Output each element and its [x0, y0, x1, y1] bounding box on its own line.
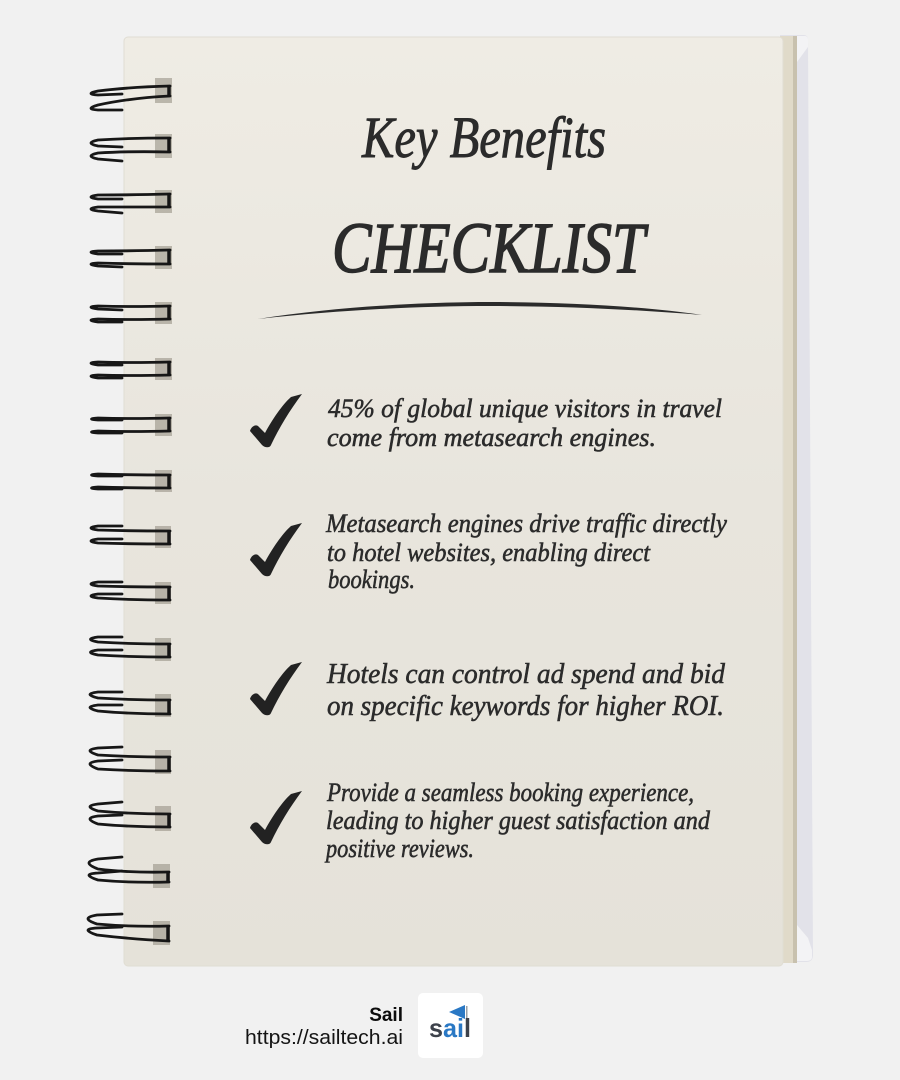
ring 16 — [88, 914, 170, 945]
ring 4 — [91, 246, 172, 269]
item 3 text — [326, 658, 725, 722]
checklist item 2 — [250, 509, 727, 594]
back cover — [780, 35, 813, 962]
item 2 text: to hotel websites, enabling direct — [327, 538, 651, 567]
item 2 text: Metasearch engines drive traffic directly — [325, 509, 727, 538]
ring 1 — [91, 78, 172, 110]
icon: check mark 4 — [250, 791, 302, 844]
item 4 text — [324, 778, 711, 863]
checklist item 3 — [250, 658, 725, 722]
spiral binding — [88, 78, 172, 945]
ring 8 — [92, 470, 172, 492]
icon: check mark 3 — [250, 662, 302, 715]
ring 6 — [91, 358, 172, 380]
footer brand — [245, 993, 483, 1058]
page edges — [780, 36, 797, 963]
brand url: https://sailtech.ai — [245, 1026, 403, 1049]
item 2 text: bookings. — [328, 565, 415, 594]
item 3 text: on specific keywords for higher ROI. — [327, 690, 724, 722]
icon: check mark 2 — [250, 523, 302, 576]
checklist item 4 — [250, 778, 711, 863]
ring 5 — [91, 302, 172, 324]
item 1 text: 45% of global unique visitors in travel — [328, 394, 722, 423]
logo tile — [418, 993, 483, 1058]
ring 9 — [91, 526, 171, 548]
ring 2 — [91, 134, 172, 161]
ring 3 — [91, 190, 172, 213]
ring 11 — [90, 637, 171, 661]
item 2 text — [325, 509, 727, 594]
ring 7 — [92, 414, 172, 436]
brand name: Sail — [369, 1005, 403, 1026]
icon: check mark 1 — [250, 394, 302, 447]
item 4 text: Provide a seamless booking experience, — [326, 778, 694, 807]
ring 14 — [90, 802, 171, 831]
paper page — [124, 37, 783, 966]
underline swoosh — [258, 302, 702, 319]
item 1 text — [327, 394, 722, 452]
item 4 text: leading to higher guest satisfaction and — [326, 806, 711, 835]
item 4 text: positive reviews. — [324, 834, 474, 863]
notebook — [124, 35, 813, 966]
item 3 text: Hotels can control ad spend and bid — [326, 658, 725, 690]
ring 12 — [90, 692, 171, 717]
logo wordmark: sail — [429, 1013, 471, 1043]
checklist item 1 — [250, 394, 722, 452]
logo sail triangle — [449, 1005, 465, 1019]
ring 13 — [90, 747, 171, 774]
heading: Checklist: CHECKLIST — [332, 208, 649, 288]
ring 10 — [91, 582, 171, 604]
heading: Key Benefits: Key Benefits — [361, 105, 606, 170]
ring 15 — [89, 857, 170, 888]
item 1 text: come from metasearch engines. — [327, 423, 656, 452]
